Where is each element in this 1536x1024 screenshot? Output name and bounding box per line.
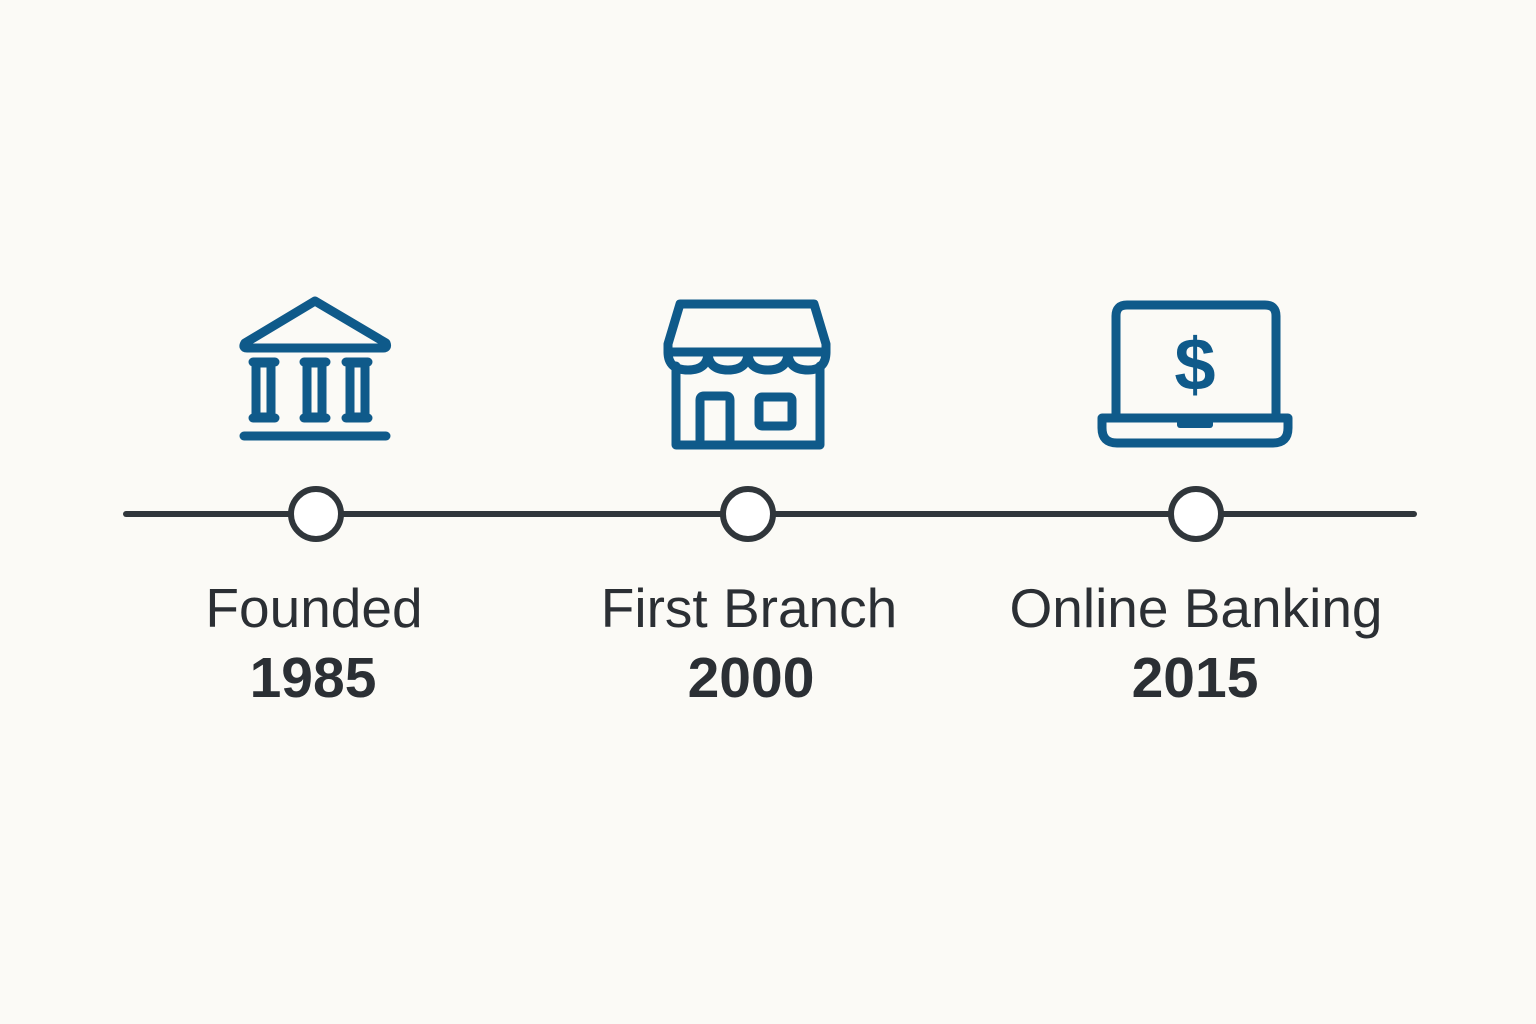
label: Founded 1985: 1985 (250, 646, 376, 710)
label: First Branch 2000 (601, 577, 897, 710)
label: Founded 1985: Founded (205, 577, 423, 639)
label: Founded 1985 (205, 577, 423, 710)
marker: 2015 (1171, 489, 1221, 539)
icon: laptop with dollar: $ (1174, 323, 1216, 406)
icon: laptop with dollar (1102, 305, 1288, 443)
label: Online Banking 2015 (1009, 577, 1383, 710)
icon: bank (244, 301, 387, 436)
label: Online Banking 2015: Online Banking (1009, 577, 1383, 639)
label: First Branch 2000: First Branch (601, 577, 897, 639)
label: Online Banking 2015: 2015 (1132, 646, 1258, 710)
marker: 1985 (291, 489, 341, 539)
timeline line (126, 511, 1414, 517)
marker: 2000 (723, 489, 773, 539)
label: First Branch 2000: 2000 (688, 646, 814, 710)
icon: store (668, 304, 826, 445)
